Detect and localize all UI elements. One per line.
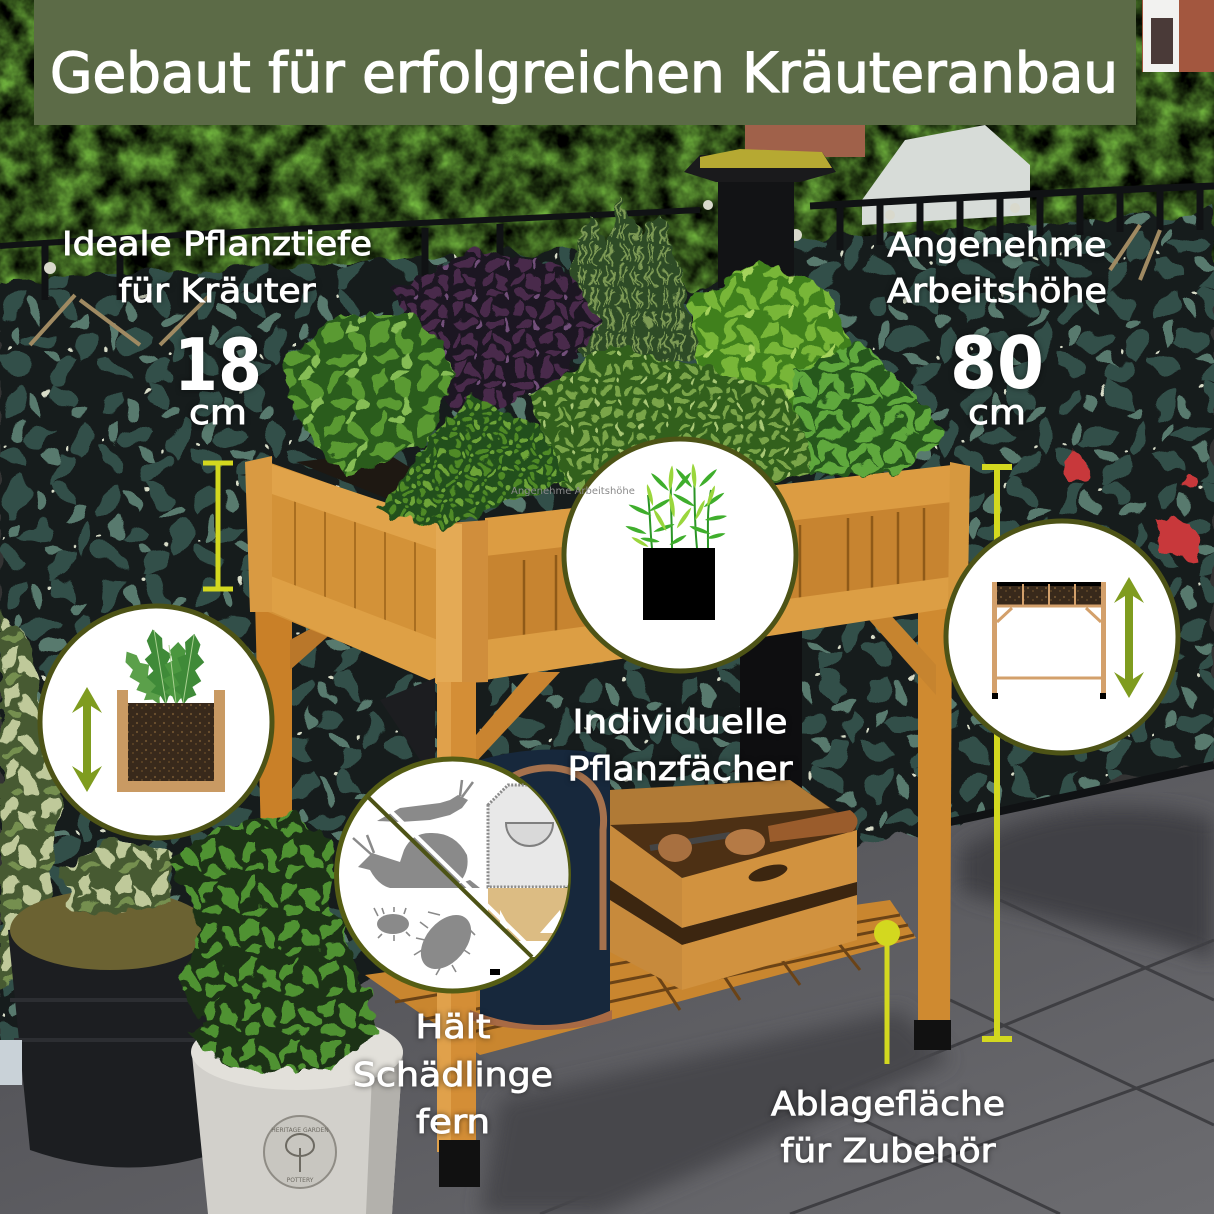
white plant pot: POTTERY <box>287 1177 314 1184</box>
table foot <box>490 969 500 975</box>
label: planting depth <box>62 224 372 433</box>
label: working height: Angenehme <box>888 225 1106 264</box>
planter right panel <box>485 468 952 680</box>
label: working height <box>887 225 1107 433</box>
label: planting depth: für Kräuter <box>118 271 316 310</box>
label: pests: Schädlinge <box>353 1055 553 1094</box>
label: planting depth: 18 <box>174 323 262 407</box>
title banner: Gebaut für erfolgreichen Kräuteranbau <box>50 41 1118 105</box>
planter front post <box>436 520 488 684</box>
double arrow <box>72 687 102 792</box>
label: storage: für Zubehör <box>780 1131 996 1170</box>
purple basil <box>395 250 600 420</box>
soil in planter <box>296 452 470 518</box>
icon circle: compartments <box>511 439 796 671</box>
label: pests: fern <box>416 1102 490 1141</box>
white plant pot: HERITAGE GARDEN <box>271 1127 329 1134</box>
label: compartments <box>568 702 793 788</box>
plant in black pot <box>170 815 380 1070</box>
arugula leaves <box>116 627 208 711</box>
label: storage: Ablagefläche <box>771 1084 1005 1123</box>
green herb right <box>790 340 945 475</box>
label: planting depth: Ideale Pflanztiefe <box>62 224 372 263</box>
rosemary <box>570 200 700 360</box>
pest silhouettes <box>353 780 481 979</box>
rear right leg <box>918 600 952 1022</box>
background trees <box>0 0 1214 300</box>
yellow measure: working height <box>982 467 1012 1039</box>
label: planting depth: cm <box>189 393 247 433</box>
planter left panel <box>268 462 438 682</box>
small shrub on black pot <box>60 840 175 915</box>
thyme and oregano <box>530 345 820 490</box>
herb sprigs <box>625 463 727 548</box>
title banner <box>34 0 1136 125</box>
mini planter <box>992 582 1106 699</box>
black fence post <box>684 149 836 790</box>
icon circle: pest protection <box>336 759 580 991</box>
watermark text: Angenehme Arbeitshöhe <box>511 486 635 497</box>
wooden crate with tools <box>610 780 858 990</box>
green basil left <box>282 315 455 478</box>
black square pot <box>643 548 715 620</box>
label: working height: Arbeitshöhe <box>887 271 1107 310</box>
paved terrace floor <box>0 765 1214 1214</box>
white plant pot <box>191 1014 403 1214</box>
filter bag and table <box>486 784 568 957</box>
prohibition slash <box>368 797 532 957</box>
black plant pot <box>0 890 240 1168</box>
soil box <box>117 690 225 792</box>
label: compartments: Individuelle <box>572 702 788 741</box>
hedge behind railing <box>0 212 1214 1060</box>
label: pests: Hält <box>416 1007 491 1046</box>
left variegated shrub <box>0 610 60 990</box>
icon circle: working height <box>946 521 1178 753</box>
bright basil <box>690 262 850 420</box>
raised planter <box>245 456 970 1187</box>
planter right post <box>948 462 970 610</box>
label: compartments: Pflanzfächer <box>568 749 793 788</box>
front leg <box>437 682 476 1152</box>
planter left post <box>245 456 272 612</box>
yellow pointer: storage shelf <box>874 920 900 1064</box>
label: working height: cm <box>968 393 1026 433</box>
lower shelf <box>365 900 916 1055</box>
label: storage <box>771 1084 1005 1170</box>
label: pests <box>353 1007 553 1141</box>
rear left leg <box>255 600 292 912</box>
plant in white pot <box>185 1005 380 1070</box>
balcony railing and string lights <box>0 186 1214 822</box>
bracing <box>290 618 335 670</box>
herb plants in planter <box>282 200 945 530</box>
yellow measure: planting depth <box>203 463 233 589</box>
label: working height: 80 <box>950 321 1044 405</box>
icon circle: planting depth <box>40 606 272 838</box>
watering can <box>380 678 612 1030</box>
curly parsley <box>380 395 570 530</box>
double arrow <box>1114 577 1144 698</box>
